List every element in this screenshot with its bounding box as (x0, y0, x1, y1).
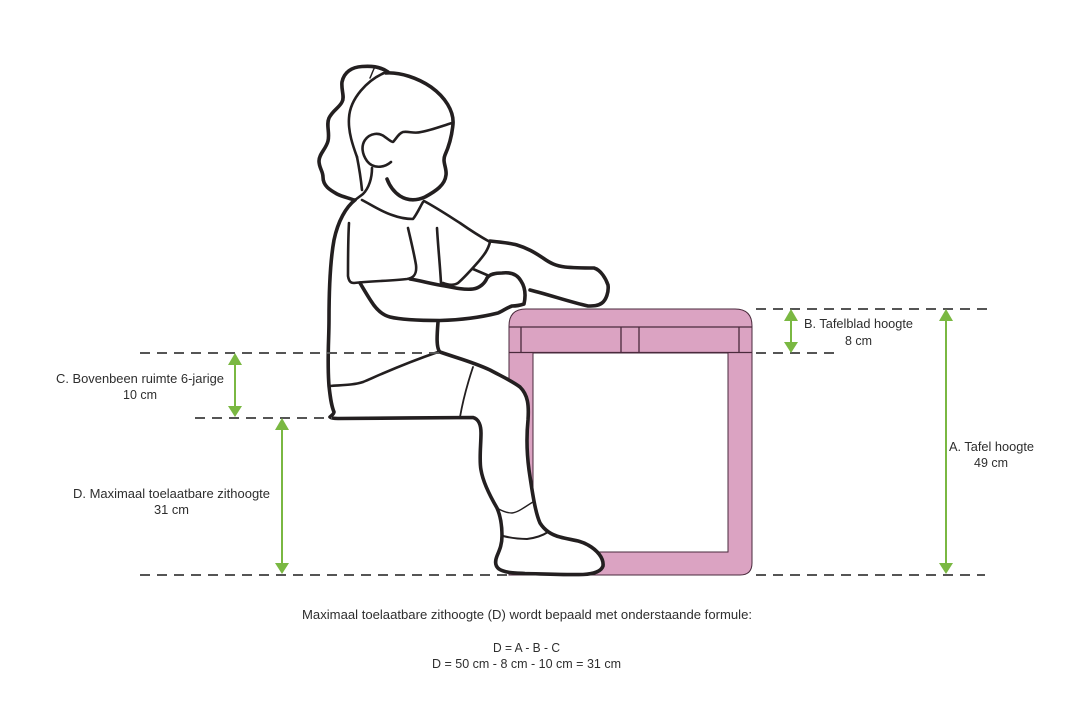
shorts hem (460, 367, 473, 417)
shorts (330, 352, 438, 386)
body fill (319, 67, 608, 575)
formula text: D = A - B - C (493, 640, 560, 655)
near sleeve (348, 223, 416, 283)
label B: 8 cm (845, 333, 872, 348)
label D: 31 cm (154, 502, 189, 517)
shirt fold (437, 228, 441, 283)
sock top (497, 502, 533, 513)
label C (56, 371, 224, 402)
hair (319, 66, 388, 200)
formula text: D = 50 cm - 8 cm - 10 cm = 31 cm (432, 656, 621, 671)
arrow: B tabletop height (784, 309, 798, 353)
shirt collar (362, 200, 423, 219)
torso back and seat (328, 200, 603, 575)
arrow: C thigh space (228, 353, 242, 417)
label C: 10 cm (123, 387, 157, 402)
shoulder and sleeve (424, 201, 490, 285)
dashed reference lines (140, 309, 990, 575)
ear and hairline (363, 123, 452, 167)
label A: 49 cm (974, 455, 1008, 470)
table (509, 309, 752, 575)
label A: A. Tafel hoogte (949, 439, 1034, 454)
formula text (302, 607, 752, 671)
label D (73, 486, 270, 517)
arrow: A table height (939, 309, 953, 574)
label A (949, 439, 1034, 470)
head (349, 73, 384, 157)
far arm and hand (490, 241, 608, 306)
shoe top (503, 532, 548, 539)
label D: D. Maximaal toelaatbare zithoogte (73, 486, 270, 501)
label C: C. Bovenbeen ruimte 6-jarige (56, 371, 224, 386)
child figure (319, 66, 608, 575)
formula text: Maximaal toelaatbare zithoogte (D) wordt bepaald met onderstaande formule: (302, 607, 752, 622)
label B: B. Tafelblad hoogte (804, 316, 913, 331)
ponytail tie (370, 67, 388, 78)
wrist detail (473, 269, 487, 275)
near forearm and hand (360, 273, 525, 320)
neck back lines (355, 157, 372, 200)
label B (804, 316, 913, 348)
arrow: D maximum seat height (275, 418, 289, 574)
